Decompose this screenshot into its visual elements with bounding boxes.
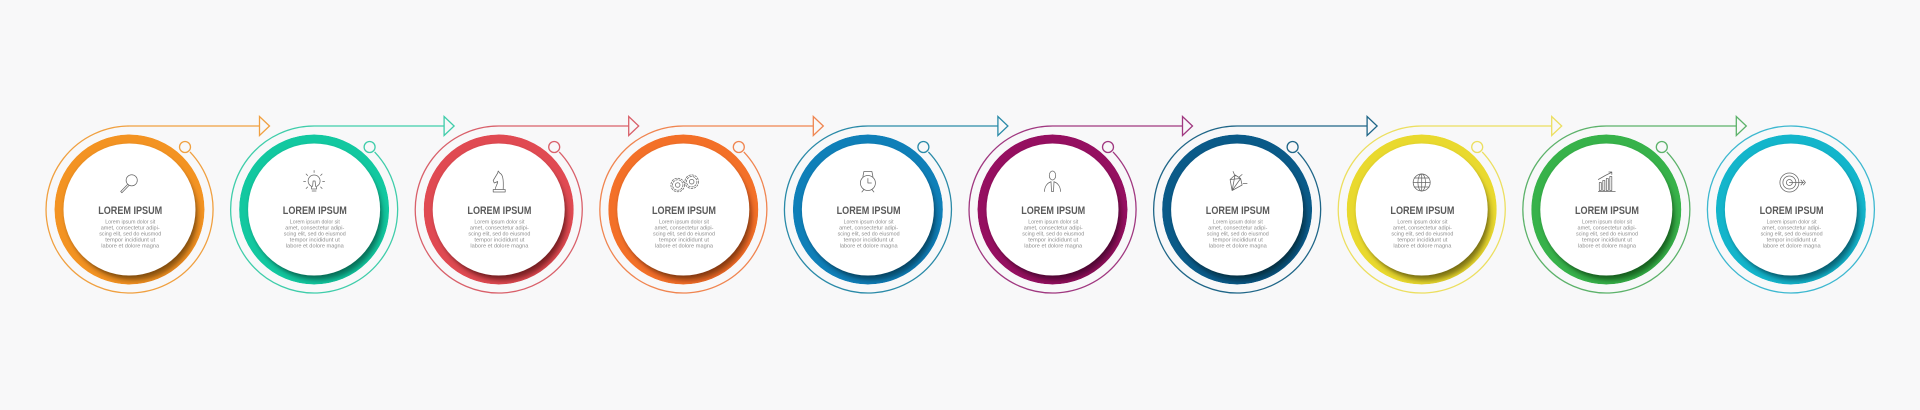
white disc [617,144,749,276]
text: labore et dolore magna [1024,243,1083,249]
text: Lorem ipsum dolor sit [105,219,156,225]
outer ring and arrow [1523,116,1746,293]
text: labore et dolore magna [470,243,529,249]
step 4: settings [600,116,823,293]
text: scing elit, sed do eiusmod [1576,231,1638,237]
step 3: strategy [415,116,639,293]
text: tempor incididunt ut [1213,237,1263,243]
text: Lorem ipsum dolor sit [290,219,340,225]
icon: light bulb [304,170,325,191]
text: Lorem ipsum dolor sit [1397,219,1448,225]
icon: globe [1413,174,1430,191]
thick ring [239,134,389,284]
outer ring and arrow [231,116,454,293]
text [1760,205,1824,249]
white disc [1356,144,1488,276]
text: LOREM IPSUM [283,205,347,217]
text: amet, consectetur adipi- [1024,225,1083,231]
text: amet, consectetur adipi- [1578,225,1637,231]
text: amet, consectetur adipi- [101,225,160,231]
step 6: person [969,116,1192,293]
text: LOREM IPSUM [98,205,162,217]
text: LOREM IPSUM [1206,205,1270,217]
text: labore et dolore magna [1393,243,1452,249]
thick ring [424,134,574,284]
text [1021,205,1085,249]
text [837,205,901,249]
text [283,205,347,249]
text [1575,205,1639,249]
text: Lorem ipsum dolor sit [1213,219,1263,225]
thick ring [793,134,943,284]
text: labore et dolore magna [1209,243,1267,249]
icon: target with arrow [1780,173,1805,192]
outer ring and arrow [784,116,1008,293]
text: tempor incididunt ut [659,237,709,243]
text: scing elit, sed do eiusmod [468,231,530,237]
thick ring [1347,134,1497,284]
text: scing elit, sed do eiusmod [99,231,161,237]
outer ring and arrow [46,116,269,293]
text: labore et dolore magna [1578,243,1637,249]
text: scing elit, sed do eiusmod [653,231,715,237]
white disc [433,144,565,276]
outer ring and arrow [1338,116,1562,293]
step 1: search [46,116,269,293]
thick ring [1716,134,1866,284]
text: scing elit, sed do eiusmod [1761,231,1823,237]
text: labore et dolore magna [655,243,714,249]
icon: magnifier [121,175,137,193]
text: tempor incididunt ut [1767,237,1817,243]
text: Lorem ipsum dolor sit [659,219,709,225]
text: amet, consectetur adipi- [285,225,344,231]
step 2: idea [231,116,454,293]
text: LOREM IPSUM [1575,205,1639,217]
text: amet, consectetur adipi- [654,225,714,231]
text: LOREM IPSUM [837,205,901,217]
text: Lorem ipsum dolor sit [1028,219,1079,225]
text: amet, consectetur adipi- [1393,225,1452,231]
icon: chess knight [493,171,505,192]
text: LOREM IPSUM [467,205,531,217]
text: scing elit, sed do eiusmod [1022,231,1084,237]
text: scing elit, sed do eiusmod [284,231,346,237]
white disc [248,144,380,276]
step 9: growth chart [1523,116,1746,293]
text: labore et dolore magna [101,243,160,249]
text [1390,205,1454,249]
step 10: target [1707,126,1874,293]
thick ring [54,134,204,284]
text: amet, consectetur adipi- [1208,225,1267,231]
text: scing elit, sed do eiusmod [1391,231,1453,237]
text: LOREM IPSUM [652,205,716,217]
white disc [1171,144,1303,276]
outer ring and arrow [415,116,639,293]
text: labore et dolore magna [840,243,898,249]
thick ring [1162,134,1312,284]
thick ring [978,134,1128,284]
text [652,205,716,249]
outer ring and arrow [1154,116,1377,293]
text [1206,205,1270,249]
outer ring [1707,126,1874,293]
text: tempor incididunt ut [1397,237,1448,243]
white disc [802,144,934,276]
text: Lorem ipsum dolor sit [474,219,525,225]
outer ring and arrow [969,116,1192,293]
white disc [64,144,196,276]
white disc [1725,144,1857,276]
step 8: globe [1338,116,1562,293]
text: amet, consectetur adipi- [839,225,898,231]
text [98,205,162,249]
text: amet, consectetur adipi- [1762,225,1821,231]
text: LOREM IPSUM [1390,205,1454,217]
text: tempor incididunt ut [474,237,525,243]
thick ring [608,134,758,284]
text: Lorem ipsum dolor sit [1767,219,1817,225]
step 5: time [784,116,1008,293]
text [467,205,531,249]
text: labore et dolore magna [1763,243,1821,249]
text: scing elit, sed do eiusmod [1207,231,1269,237]
thick ring [1531,134,1681,284]
text: tempor incididunt ut [105,237,156,243]
white disc [1540,144,1672,276]
text: amet, consectetur adipi- [470,225,529,231]
text: LOREM IPSUM [1021,205,1085,217]
white disc [986,144,1118,276]
text: LOREM IPSUM [1760,205,1824,217]
icon: gears [671,175,698,192]
text: Lorem ipsum dolor sit [1582,219,1632,225]
step 7: diamond [1154,116,1377,293]
text: scing elit, sed do eiusmod [838,231,900,237]
text: labore et dolore magna [286,243,344,249]
text: Lorem ipsum dolor sit [844,219,894,225]
outer ring and arrow [600,116,823,293]
icon: person with tie [1044,171,1060,192]
icon: bar chart [1598,172,1615,192]
icon: alarm clock [860,172,875,192]
text: tempor incididunt ut [290,237,340,243]
icon: diamond [1230,172,1247,190]
text: tempor incididunt ut [1582,237,1632,243]
text: tempor incididunt ut [844,237,894,243]
text: tempor incididunt ut [1028,237,1079,243]
